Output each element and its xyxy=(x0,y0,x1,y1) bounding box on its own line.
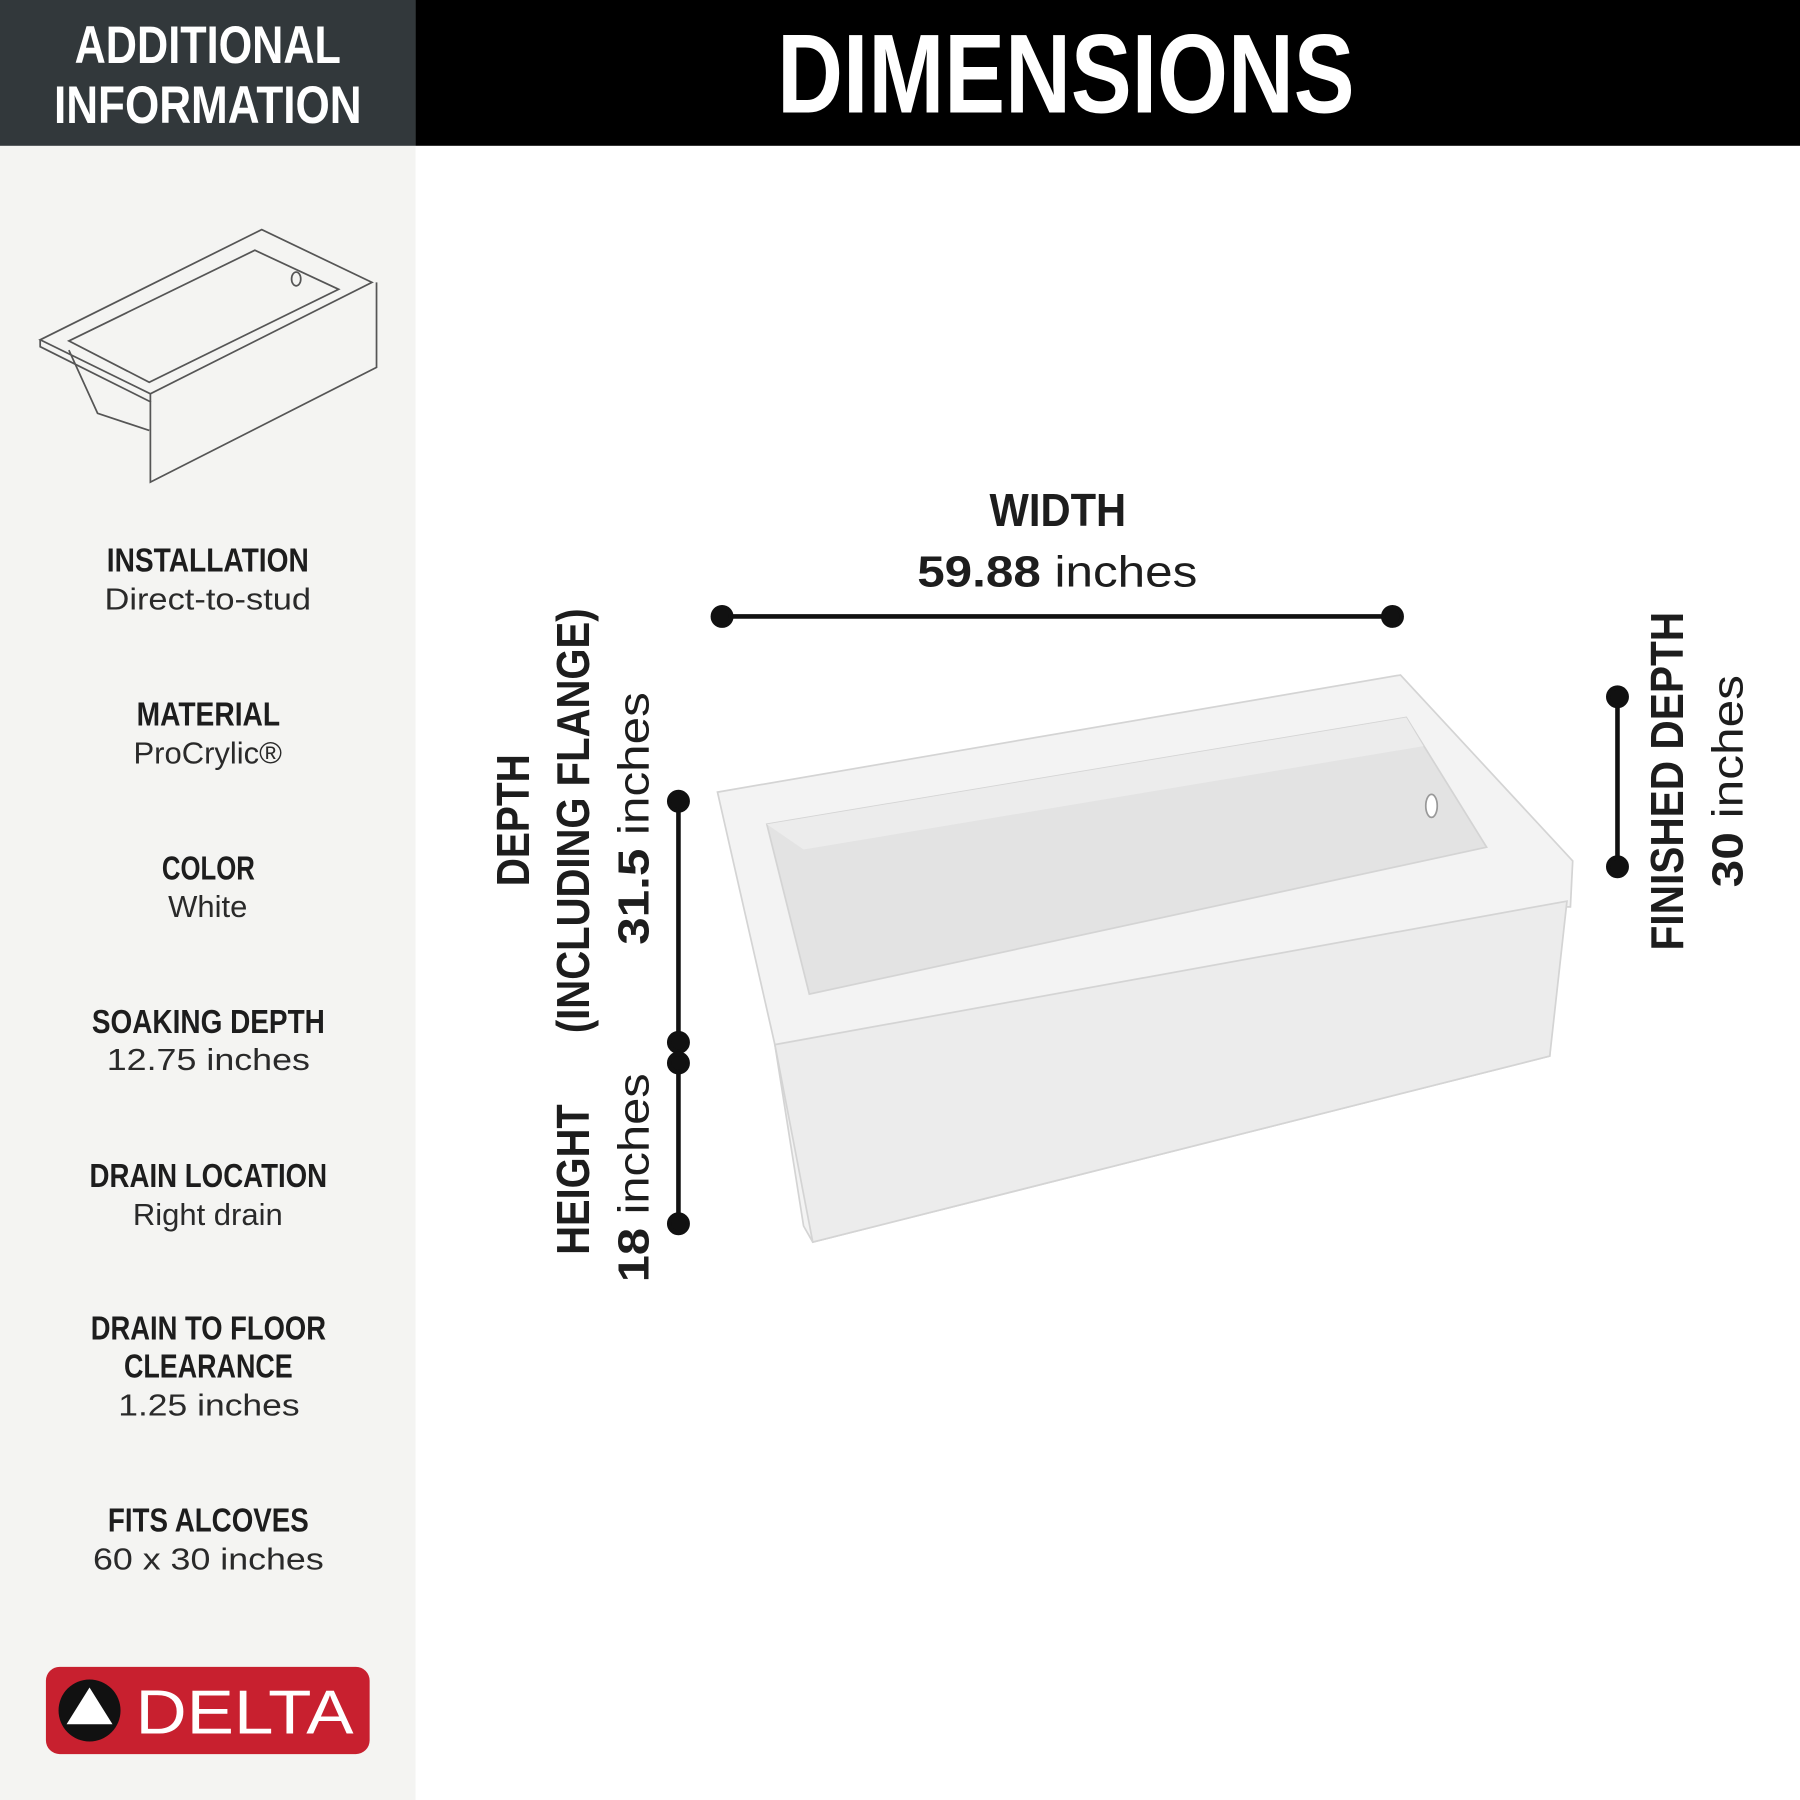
header: additional information: INFORMATION xyxy=(54,76,362,135)
height label: HEIGHT xyxy=(547,1104,599,1255)
spec: drain location xyxy=(90,1158,327,1232)
width label: 59.88 inches xyxy=(917,549,1197,597)
arrow: width xyxy=(713,607,1402,626)
spec: material xyxy=(134,697,282,770)
spec: color: White xyxy=(168,889,247,924)
header: additional information xyxy=(0,0,416,146)
spec: drain to floor clearance xyxy=(91,1311,326,1422)
spec: installation: Direct-to-stud xyxy=(104,582,311,617)
logo: delta: DELTA xyxy=(135,1678,354,1747)
spec: material: MATERIAL xyxy=(137,697,280,734)
width label: WIDTH xyxy=(990,484,1126,536)
depth label: 31.5 inches xyxy=(611,692,659,945)
spec: drain to floor clearance: DRAIN TO FLOOR xyxy=(91,1311,326,1348)
finished depth label: 30 inches xyxy=(1705,675,1753,887)
spec: soaking depth: 12.75 inches xyxy=(107,1042,310,1077)
arrow: depth xyxy=(669,792,688,1052)
header: dimensions: DIMENSIONS xyxy=(777,11,1355,137)
depth label: DEPTH xyxy=(487,754,539,886)
header: additional information: ADDITIONAL xyxy=(75,16,341,75)
spec: color: COLOR xyxy=(162,850,255,887)
spec: color xyxy=(162,850,255,924)
spec: drain to floor clearance: CLEARANCE xyxy=(124,1349,293,1386)
header: dimensions xyxy=(416,0,1800,146)
arrow: finished depth xyxy=(1608,688,1627,876)
spec: drain location: Right drain xyxy=(133,1197,283,1232)
icon: tub line drawing xyxy=(40,230,377,482)
logo: delta xyxy=(46,1667,370,1754)
depth label: (INCLUDING FLANGE) xyxy=(547,608,599,1033)
spec: fits alcoves: 60 x 30 inches xyxy=(93,1541,324,1576)
spec: installation: INSTALLATION xyxy=(107,543,309,580)
spec: soaking depth: SOAKING DEPTH xyxy=(92,1004,325,1041)
spec: fits alcoves xyxy=(93,1502,324,1576)
finished depth label xyxy=(1641,612,1753,951)
spec: soaking depth xyxy=(92,1004,325,1077)
arrow: height xyxy=(669,1054,688,1233)
finished depth label: FINISHED DEPTH xyxy=(1641,612,1693,951)
tub image xyxy=(717,675,1573,1242)
spec: installation xyxy=(104,543,311,617)
spec: drain to floor clearance: 1.25 inches xyxy=(118,1387,300,1422)
height label xyxy=(547,1073,659,1282)
width label xyxy=(917,484,1197,597)
spec: drain location: DRAIN LOCATION xyxy=(90,1158,327,1195)
height label: 18 inches xyxy=(611,1073,659,1282)
spec: fits alcoves: FITS ALCOVES xyxy=(108,1502,309,1539)
spec: material: ProCrylic® xyxy=(134,735,282,770)
depth label xyxy=(487,608,659,1033)
left panel background xyxy=(0,0,416,1800)
